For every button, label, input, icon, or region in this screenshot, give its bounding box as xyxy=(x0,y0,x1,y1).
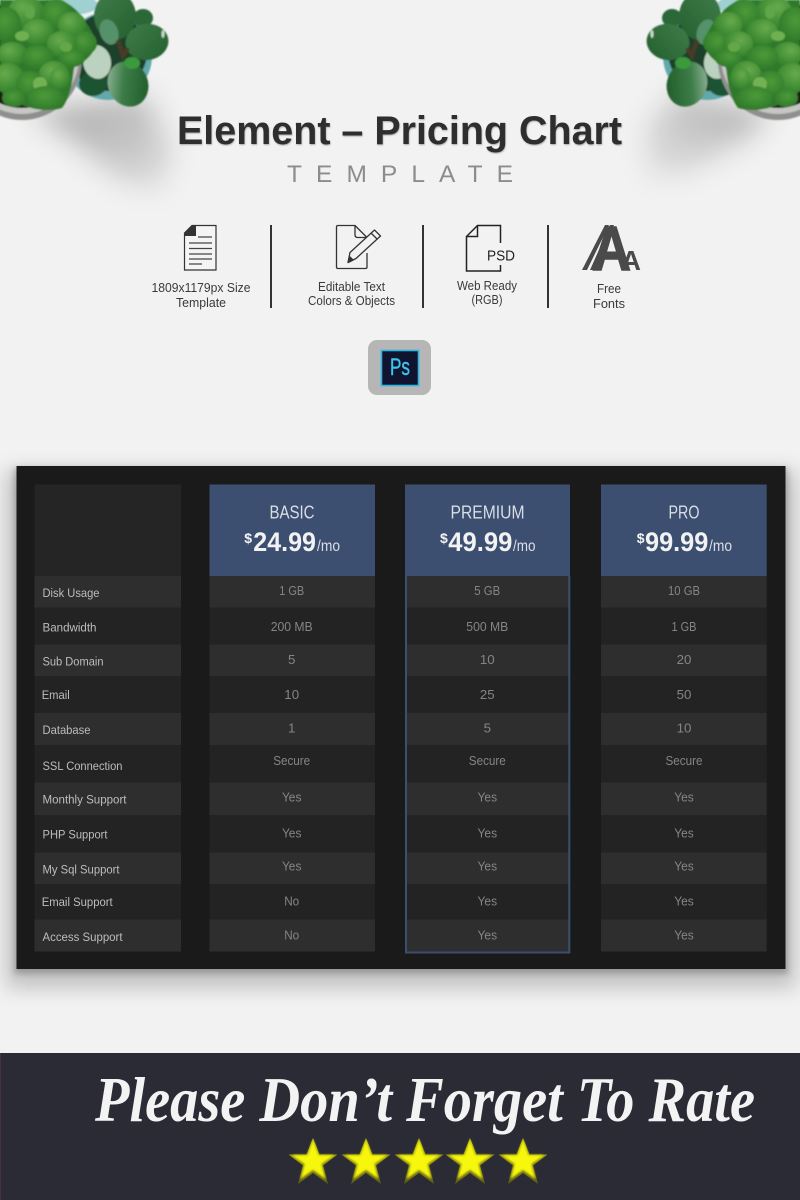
column: feature labels: My Sql Support xyxy=(42,863,120,877)
header: Pro: 99.99 xyxy=(645,527,708,557)
column: Pro plan: Secure xyxy=(666,753,702,768)
column: Premium plan: Yes xyxy=(478,859,497,874)
title: Element – Pricing Chart xyxy=(177,109,622,153)
column: Basic plan: 200 MB xyxy=(271,619,313,634)
column: Premium plan: Secure xyxy=(469,753,506,768)
caption: free fonts: Fonts xyxy=(593,296,625,311)
column: Basic plan: Secure xyxy=(273,753,310,768)
column: feature labels: Monthly Support xyxy=(42,793,127,807)
column: Pro plan: 10 xyxy=(677,720,691,735)
decorative plants top right xyxy=(644,0,800,180)
header: Basic: /mo xyxy=(317,538,340,555)
column: Basic plan: Yes xyxy=(282,826,302,841)
column: Pro plan xyxy=(601,484,767,952)
header: Premium: PREMIUM xyxy=(450,502,524,522)
icon: five stars xyxy=(288,1138,548,1184)
caption: editable: Colors & Objects xyxy=(308,293,395,308)
header: Premium xyxy=(405,484,570,576)
panel: pricing table xyxy=(6,466,796,988)
column: Basic plan: No xyxy=(284,927,299,942)
column: Premium plan: Yes xyxy=(478,790,497,805)
column: Basic plan: Yes xyxy=(282,859,302,874)
column: Basic plan: 5 xyxy=(288,652,295,667)
column: Premium plan xyxy=(405,484,570,952)
column: Basic plan: Yes xyxy=(282,790,302,805)
decorative plants top left xyxy=(0,0,172,190)
column: Premium plan: Yes xyxy=(478,894,497,909)
column: Pro plan: 20 xyxy=(677,652,691,667)
icon: Photoshop badge xyxy=(368,340,431,395)
divider 1 xyxy=(270,225,272,308)
column: Pro plan: Yes xyxy=(674,826,694,841)
icon: document with pencil xyxy=(336,226,380,268)
divider 3 xyxy=(547,225,549,308)
icon: Photoshop badge: Ps xyxy=(390,354,410,381)
column: feature labels: Email Support xyxy=(42,895,113,909)
subtitle: TEMPLATE xyxy=(287,161,513,188)
column: Pro plan: Yes xyxy=(674,859,694,874)
icon: PSD file: PSD xyxy=(487,248,515,264)
header: Pro xyxy=(601,484,767,576)
column: Premium plan: 10 xyxy=(480,652,495,667)
column: Premium plan: 500 MB xyxy=(466,619,508,634)
header: Premium: /mo xyxy=(513,538,536,555)
header: Pro: /mo xyxy=(709,538,732,555)
caption: web ready: (RGB) xyxy=(472,292,502,307)
column: Pro plan: 10 GB xyxy=(668,583,700,598)
caption: editable: Editable Text xyxy=(318,279,385,294)
header: Pro: PRO xyxy=(668,502,700,522)
caption: size: Template xyxy=(176,295,226,310)
feature: size template xyxy=(152,226,250,310)
column: Pro plan: 1 GB xyxy=(672,619,697,634)
column: Pro plan: Yes xyxy=(674,790,694,805)
header: Pro: $ xyxy=(637,530,645,546)
caption: free fonts: Free xyxy=(597,281,621,296)
header: Basic: $ xyxy=(244,530,252,546)
header: Premium: 49.99 xyxy=(448,527,512,557)
column: Premium plan: 25 xyxy=(480,687,495,702)
column: feature labels: Sub Domain xyxy=(42,654,104,668)
header: Basic: BASIC xyxy=(270,502,314,522)
feature: free fonts xyxy=(582,215,641,311)
icon: font letters: A xyxy=(592,215,631,284)
divider 2 xyxy=(422,225,424,308)
icon: font letters: A xyxy=(621,245,641,276)
header: Premium: $ xyxy=(440,530,448,546)
column: Premium plan: Yes xyxy=(478,826,497,841)
column: Premium plan: Yes xyxy=(478,927,497,942)
column: Basic plan: No xyxy=(284,894,299,909)
column: Basic plan: 1 xyxy=(288,720,295,735)
column: feature labels: Bandwidth xyxy=(42,620,97,634)
column: feature labels: SSL Connection xyxy=(42,759,123,773)
column: Premium plan: 5 xyxy=(484,720,491,735)
column: feature labels xyxy=(34,484,181,952)
column: Basic plan xyxy=(210,484,375,952)
panel: rating banner xyxy=(0,1053,800,1200)
feature: editable text xyxy=(308,226,395,308)
column: Basic plan: 10 xyxy=(284,687,299,702)
header: Basic xyxy=(210,484,375,576)
column: feature labels: Disk Usage xyxy=(42,586,100,600)
header: Basic: 24.99 xyxy=(253,527,316,557)
column: Basic plan: 1 GB xyxy=(279,583,304,598)
column: Pro plan: 50 xyxy=(677,687,691,702)
column: feature labels: Email xyxy=(42,688,70,702)
column: feature labels: Database xyxy=(42,723,91,737)
feature: web ready xyxy=(457,226,518,307)
column: feature labels: PHP Support xyxy=(42,828,108,842)
caption: web ready: Web Ready xyxy=(457,278,518,293)
icon: document xyxy=(184,226,216,270)
column: Premium plan: 5 GB xyxy=(474,583,500,598)
caption: size: 1809x1179px Size xyxy=(152,280,250,295)
column: feature labels: Access Support xyxy=(42,930,123,944)
column: Pro plan: Yes xyxy=(674,927,694,942)
column: Pro plan: Yes xyxy=(674,894,694,909)
